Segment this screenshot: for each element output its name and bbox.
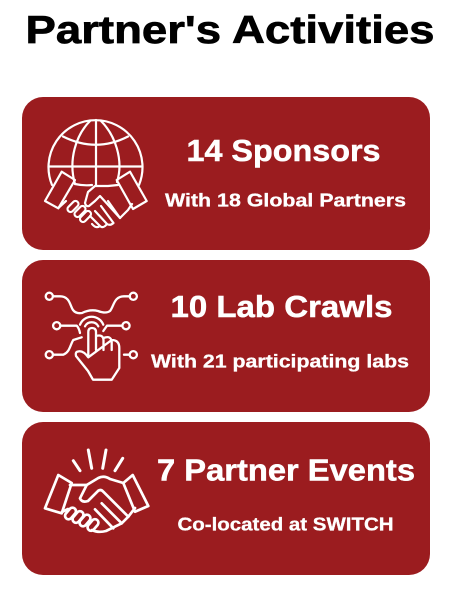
panel: sponsors bbox=[22, 97, 430, 250]
text: co-located at SWITCH: Co-located at SWITCH bbox=[178, 514, 394, 534]
icon: handshake with rays bbox=[45, 450, 148, 532]
panel: lab crawls bbox=[22, 260, 430, 412]
text: 18 global partners: With 18 Global Partners bbox=[165, 190, 406, 210]
heading: 7 Partner Events: 7 Partner Events bbox=[157, 452, 415, 488]
heading: 10 Lab Crawls: 10 Lab Crawls bbox=[170, 289, 392, 324]
text: 21 participating labs: With 21 participating labs bbox=[151, 350, 409, 372]
panel: partner events bbox=[22, 422, 430, 575]
icon: hand touching circuit bbox=[46, 293, 137, 380]
heading: 14 Sponsors: 14 Sponsors bbox=[186, 133, 380, 168]
title: Partner's Activities bbox=[26, 9, 434, 52]
icon: globe with handshake bbox=[45, 120, 147, 227]
